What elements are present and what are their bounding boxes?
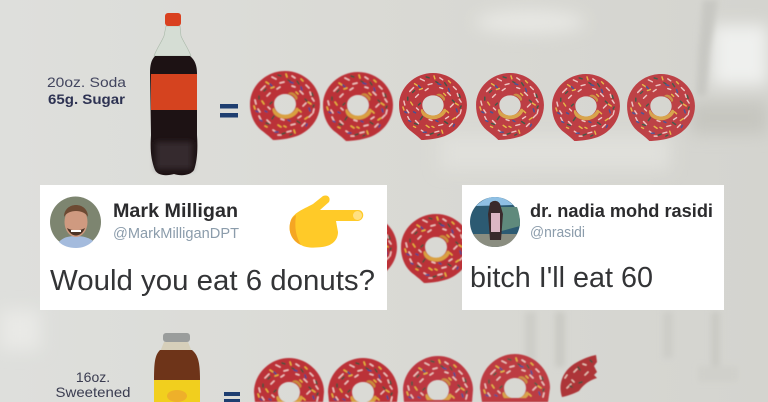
tea bottle [154,333,200,402]
handle: @MarkMilliganDPT [113,225,239,242]
icon: pointing hand emoji [290,195,363,248]
row 1 label: 20oz. Soda 65g. Sugar: 65g. Sugar [48,91,126,107]
row 3 label: 16oz. Sweetened [56,369,130,400]
tweet text: Would you eat 6 donuts? [50,265,375,297]
tweet card: Mark Milligan [40,185,387,310]
tweet text: bitch I'll eat 60 [470,262,653,294]
row 1 label: 20oz. Soda 65g. Sugar: 20oz. Soda [47,74,126,90]
avatar: Mark Milligan [50,196,101,248]
row 3: donuts [254,354,550,402]
row 1 label: 20oz. Soda 65g. Sugar [47,74,126,107]
row 1: six donuts [250,71,695,141]
row 2: donuts behind tweets [327,214,471,283]
tweet card: dr. nadia mohd rasidi [462,185,724,310]
handle: @nrasidi [530,224,585,241]
equals sign, row 3 [224,392,240,402]
equals sign, row 1 [220,104,238,118]
row 3 label: 16oz. Sweetened: 16oz. [76,369,110,385]
name: dr. nadia mohd rasidi [530,201,713,221]
name: Mark Milligan [113,201,238,222]
bitten donut piece [560,355,597,397]
avatar: nadia [470,197,520,247]
soda bottle [150,13,197,175]
row 3 label: 16oz. Sweetened: Sweetened [56,384,130,400]
